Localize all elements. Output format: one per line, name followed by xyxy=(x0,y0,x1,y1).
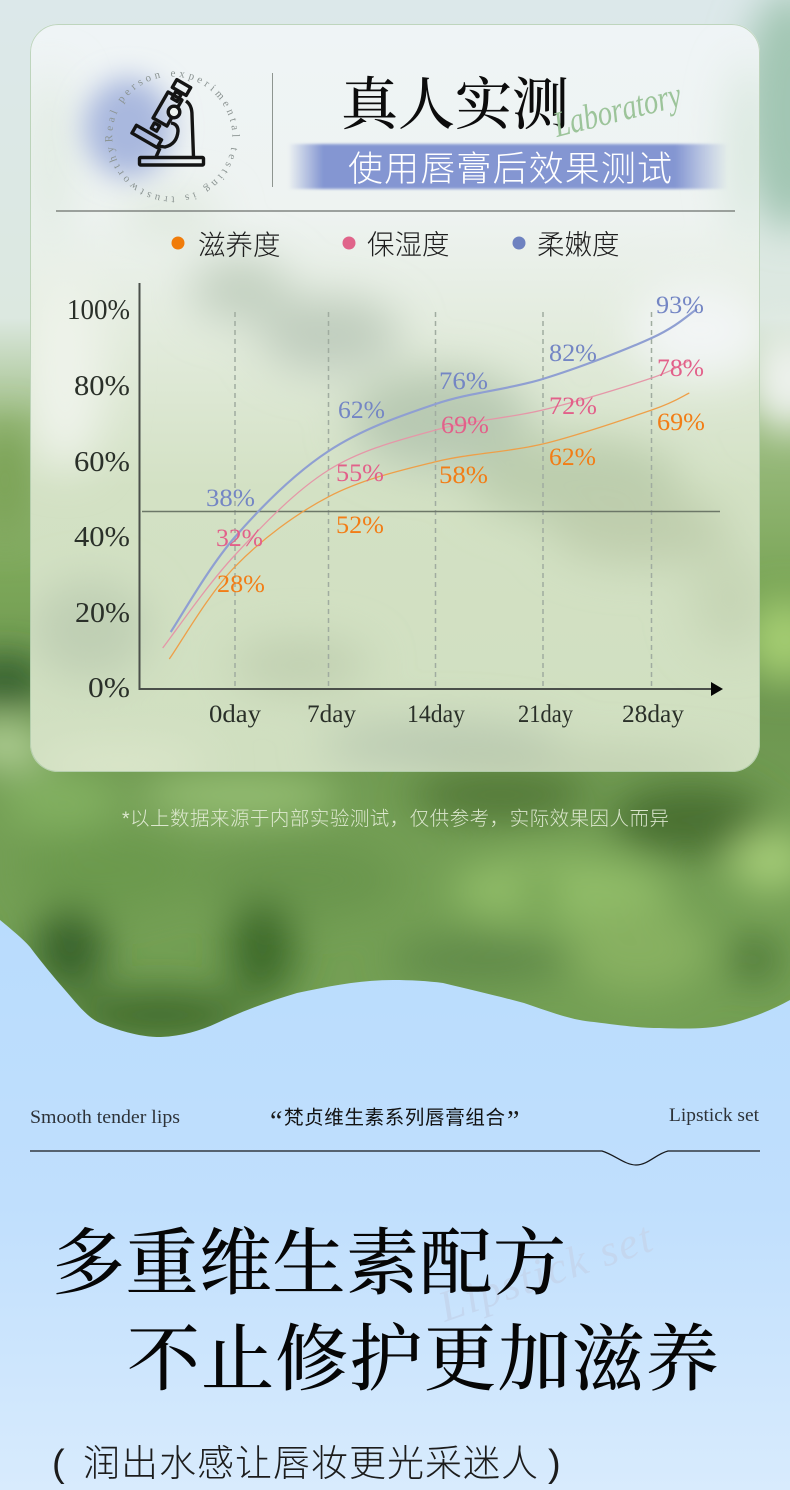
y axis labels: 40% xyxy=(74,522,130,553)
sub-headline: ( xyxy=(52,1443,65,1485)
wave shape xyxy=(0,920,790,1490)
softness values: 93% xyxy=(656,292,704,319)
badge blue glow xyxy=(84,78,172,178)
nourishing values: 69% xyxy=(657,409,705,436)
curve: moisture xyxy=(163,360,690,648)
y axis labels xyxy=(67,295,130,704)
axes xyxy=(140,283,723,696)
header rule xyxy=(56,210,735,212)
script accent: Laboratory: Laboratory xyxy=(548,74,685,145)
y axis labels: 0% xyxy=(88,673,130,704)
footnote: *以上数据来源于内部实验测试，仅供参考，实际效果因人而异 xyxy=(122,808,669,830)
x axis labels: 7day xyxy=(307,701,356,728)
sub-headline: 润出水感让唇妆更光采迷人 xyxy=(83,1443,538,1484)
softness values: 76% xyxy=(439,368,488,395)
curve: nourishing xyxy=(169,393,689,659)
moisture values: 72% xyxy=(549,393,597,420)
vertical divider xyxy=(272,73,274,187)
subtitle text: 使用唇膏后效果测试 xyxy=(348,150,672,189)
script watermark: Lipstick set xyxy=(431,1212,660,1332)
legend: moisture: 保湿度 xyxy=(367,229,450,260)
midline xyxy=(142,510,720,512)
ring text: Real person experimental testing is trustworthy xyxy=(105,71,240,203)
header centre title: 梵贞维生素系列唇膏组合 xyxy=(284,1106,505,1129)
band fill xyxy=(288,144,728,189)
nourishing values: 52% xyxy=(336,512,384,539)
header centre title: “ xyxy=(270,1106,282,1137)
header right label: Lipstick set xyxy=(669,1105,760,1126)
softness values: 38% xyxy=(206,485,255,512)
nourishing values xyxy=(217,409,705,598)
day gridlines xyxy=(235,312,652,688)
nourishing values: 28% xyxy=(217,571,265,598)
header left label: Smooth tender lips xyxy=(30,1107,180,1128)
moisture values: 32% xyxy=(216,525,263,552)
softness values xyxy=(206,292,704,512)
curve: softness xyxy=(171,309,697,632)
sub-headline: ) xyxy=(548,1443,561,1485)
y axis labels: 60% xyxy=(74,447,130,478)
panel: glass test card xyxy=(30,24,760,772)
x axis labels: 14day xyxy=(407,701,465,728)
y axis labels: 20% xyxy=(75,598,130,629)
moisture values: 69% xyxy=(441,412,489,439)
moisture values: 55% xyxy=(336,460,384,487)
nourishing values: 58% xyxy=(439,462,488,489)
x axis labels: 28day xyxy=(622,701,684,728)
header badge: microscope with ring text xyxy=(70,64,240,203)
header centre title: ” xyxy=(507,1106,519,1137)
legend xyxy=(172,229,620,260)
softness values: 62% xyxy=(338,397,385,424)
subtitle band xyxy=(288,144,728,189)
legend: softness: 柔嫩度 xyxy=(537,229,620,260)
nourishing values: 62% xyxy=(549,444,596,471)
title: 真人实测 xyxy=(341,74,569,137)
line chart xyxy=(67,283,723,728)
headline line 1: 多重维生素配方 xyxy=(52,1223,566,1304)
legend: nourishing: 滋养度 xyxy=(198,230,280,260)
x axis labels: 0day xyxy=(209,701,262,728)
header centre title xyxy=(270,1106,519,1137)
moisture values xyxy=(216,355,704,552)
section header xyxy=(30,1105,760,1165)
x axis labels: 21day xyxy=(518,701,573,728)
x axis labels xyxy=(209,701,684,728)
background: blurred foliage xyxy=(0,0,790,1060)
header line with dip xyxy=(30,1151,760,1165)
panel: blue wave section xyxy=(0,920,790,1490)
moisture values: 78% xyxy=(657,355,704,382)
softness values: 82% xyxy=(549,340,597,367)
icon: microscope xyxy=(132,80,204,165)
card surface xyxy=(25,24,770,786)
headline line 2: 不止修护更加滋养 xyxy=(127,1319,719,1400)
y axis labels: 100% xyxy=(67,295,130,326)
y axis labels: 80% xyxy=(74,371,130,402)
